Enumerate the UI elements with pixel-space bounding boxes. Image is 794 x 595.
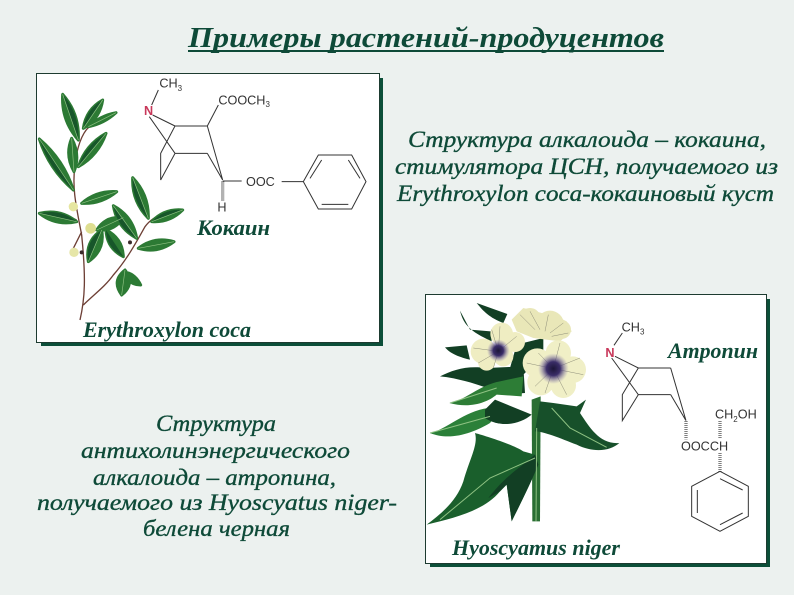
chemical structure: cocaine: COOCH — [218, 93, 265, 107]
label: Hyoscyamus niger: Hyoscyamus niger — [451, 535, 620, 560]
title: Примеры растений-продуцентов — [187, 22, 664, 54]
chemical structure: cocaine — [144, 77, 366, 215]
text block: cocaine description: стимулятора ЦСН, получаемого из — [395, 154, 778, 179]
chemical structure: cocaine: CH — [159, 77, 178, 91]
text block: cocaine description: Erythroxylon coca-кокаиновый куст — [396, 181, 774, 206]
chemical structure: cocaine: 3 — [265, 100, 270, 109]
chemical structure: cocaine: N — [144, 104, 153, 118]
text block: cocaine description — [395, 127, 778, 206]
chemical structure: cocaine: H — [217, 201, 226, 215]
text block: atropine description: белена черная — [143, 516, 290, 541]
chemical structure: atropine — [605, 320, 757, 531]
text block: atropine description: Структура — [156, 411, 276, 436]
label: Атропин: Атропин — [666, 338, 758, 363]
chemical structure: atropine: CH — [622, 320, 640, 334]
text block: atropine description — [37, 411, 397, 541]
panel: henbane plant and atropine structure — [426, 294, 770, 567]
label: Erythroxylon coca: Erythroxylon coca — [82, 317, 251, 342]
illustration: Hyoscyamus niger — [427, 303, 619, 525]
text block: cocaine description: Структура алкалоида – кокаина, — [408, 127, 766, 152]
text block: atropine description: алкалоида – атропина, — [93, 465, 336, 490]
label: Кокаин: Кокаин — [196, 215, 270, 240]
illustration: Erythroxylon coca — [39, 94, 183, 320]
chemical structure: cocaine: OOC — [246, 175, 275, 189]
chemical structure: cocaine: 3 — [178, 84, 183, 93]
chemical structure: atropine: OOCCH — [681, 439, 728, 453]
panel: coca plant and cocaine structure — [36, 74, 383, 346]
chemical structure: atropine: CH — [715, 408, 733, 422]
chemical structure: atropine: 2 — [733, 415, 738, 424]
text block: atropine description: антихолинэнергического — [81, 438, 350, 463]
text block: atropine description: получаемого из Hyoscyatus niger- — [37, 490, 397, 515]
chemical structure: atropine: OH — [738, 408, 757, 422]
chemical structure: atropine: N — [605, 346, 614, 360]
chemical structure: atropine: 3 — [640, 328, 645, 337]
